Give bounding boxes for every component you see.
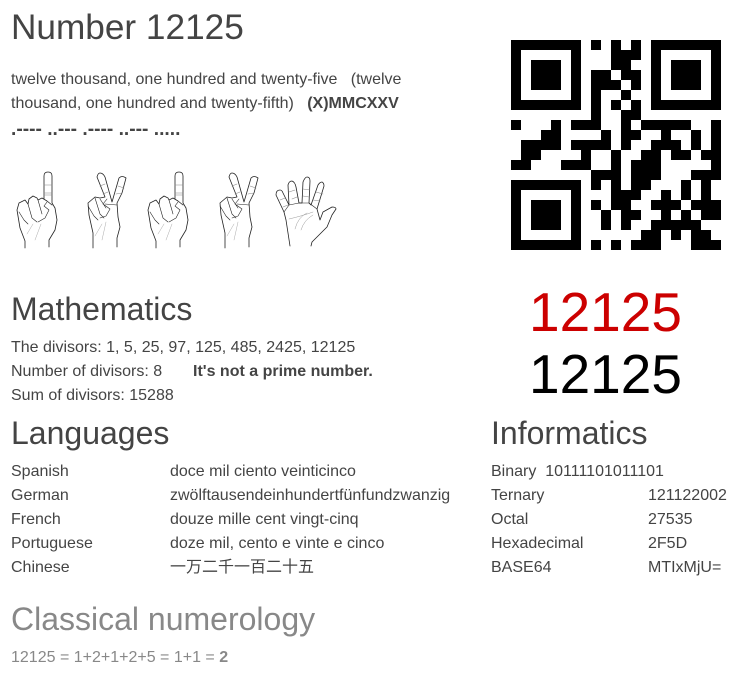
informatics table: BASE64 [491, 559, 551, 576]
divisors list: The divisors: 1, 5, 25, 97, 125, 485, 2425, 12125 [11, 339, 355, 356]
heading: classical numerology: Classical numerology [11, 601, 315, 637]
informatics table: MTIxMjU= [648, 559, 721, 576]
informatics table [491, 463, 727, 576]
number in words [11, 71, 401, 112]
heading: informatics: Informatics [491, 415, 647, 451]
large red number: 12125 [529, 281, 682, 343]
languages table: doze mil, cento e vinte e cinco [170, 535, 384, 552]
number in words: thousand, one hundred and twenty-fifth) (X)MMCXXV [11, 95, 399, 112]
informatics table: 2F5D [648, 535, 687, 552]
languages table: douze mille cent vingt-cinq [170, 511, 359, 528]
large black number: 12125 [529, 343, 682, 405]
hand: five [276, 177, 336, 246]
numerology formula: 12125 = 1+2+1+2+5 = 1+1 = 2 [11, 649, 228, 666]
title: Number 12125 [11, 8, 244, 47]
sign language hands [16, 172, 336, 248]
informatics table: 121122002 [648, 487, 727, 504]
languages table: French [11, 511, 61, 528]
hand: one [17, 172, 57, 248]
languages table: Portuguese [11, 535, 93, 552]
number in words: twelve thousand, one hundred and twenty-five (twelve [11, 71, 401, 88]
languages table: 一万二千一百二十五 [170, 559, 314, 576]
informatics table: Hexadecimal [491, 535, 583, 552]
heading: languages: Languages [11, 415, 169, 451]
languages table [11, 463, 450, 576]
number of divisors: Number of divisors: 8 [11, 363, 162, 380]
hand: two [220, 173, 258, 248]
hand: one [148, 172, 188, 248]
QR code [511, 40, 721, 250]
informatics table: 27535 [648, 511, 692, 528]
hand: two [88, 173, 126, 248]
informatics table: Ternary [491, 487, 544, 504]
informatics table: Octal [491, 511, 528, 528]
languages table: Chinese [11, 559, 70, 576]
languages table: zwölftausendeinhundertfünfundzwanzig [170, 487, 450, 504]
sum of divisors: Sum of divisors: 15288 [11, 387, 174, 404]
heading: mathematics: Mathematics [11, 291, 192, 327]
languages table: doce mil ciento veinticinco [170, 463, 356, 480]
prime statement: It's not a prime number. [193, 363, 373, 380]
informatics table: Binary 10111101011101 [491, 463, 664, 480]
morse code: .---- ..--- .---- ..--- ..... [11, 119, 180, 140]
languages table: Spanish [11, 463, 69, 480]
languages table: German [11, 487, 69, 504]
